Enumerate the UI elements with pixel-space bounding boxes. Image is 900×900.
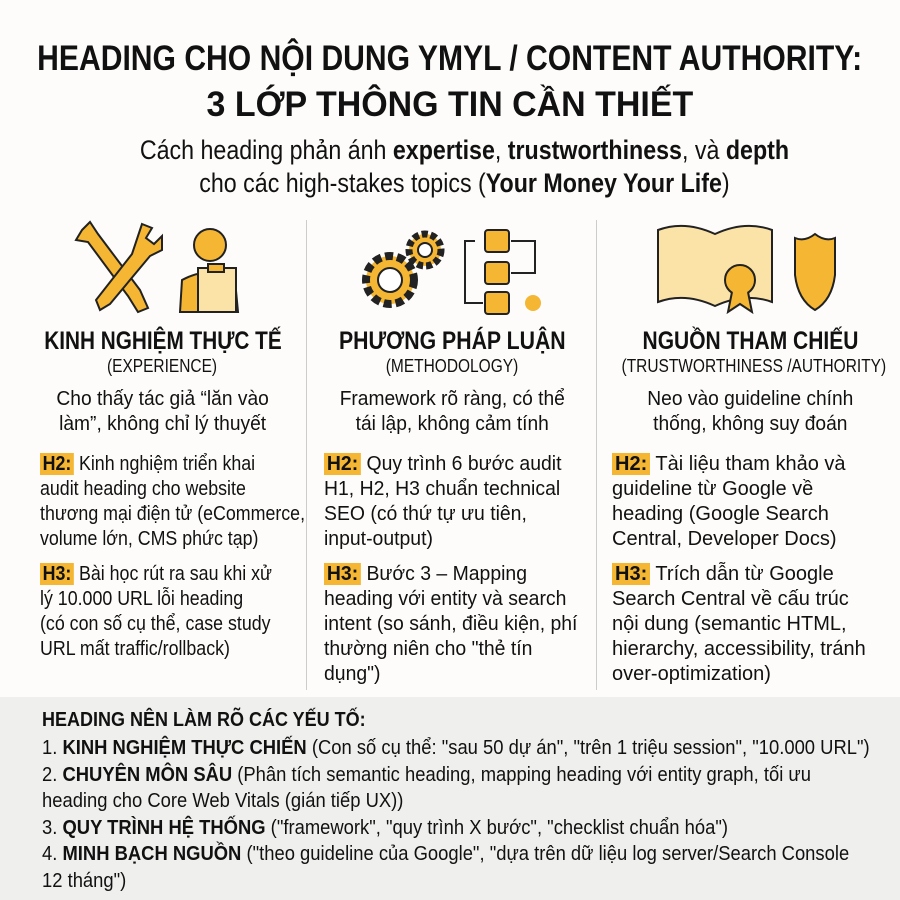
bottom list: 2. CHUYÊN MÔN SÂU (Phân tích semantic heading, mapping heading với entity graph, tối ưu [42, 764, 811, 786]
H2 block [40, 453, 305, 550]
description: Cho thấy tác giả “lăn vào [56, 388, 269, 410]
H3 block: nội dung (semantic HTML, [612, 613, 847, 635]
H2 block: heading (Google Search [612, 503, 829, 525]
H3 block [40, 563, 272, 660]
panel: experience [40, 220, 305, 660]
description [56, 388, 269, 435]
title: HEADING CHO NỘI DUNG YMYL / CONTENT AUTHORITY: [38, 39, 862, 78]
H3 block: heading với entity và search [324, 588, 566, 610]
H2 block: Central, Developer Docs) [612, 528, 837, 550]
H2 block: SEO (có thứ tự ưu tiên, [324, 503, 527, 525]
H2 block: guideline từ Google về [612, 478, 813, 500]
H2 block: H1, H2, H3 chuẩn technical [324, 478, 560, 500]
heading: PHƯƠNG PHÁP LUẬN [339, 327, 566, 355]
H2 block [324, 453, 562, 550]
description: làm”, không chỉ lý thuyết [59, 413, 266, 435]
title [38, 38, 862, 124]
H2 block: volume lớn, CMS phức tạp) [40, 528, 258, 550]
bottom list [42, 736, 870, 892]
H3 block: URL mất traffic/rollback) [40, 638, 230, 660]
description [340, 388, 565, 435]
description: tái lập, không cảm tính [356, 413, 549, 435]
H2 block: input-output) [324, 528, 433, 550]
description: Framework rõ ràng, có thể [340, 388, 565, 410]
H3 block: Search Central về cấu trúc [612, 588, 849, 610]
H3 block: H3: Bước 3 – Mapping [327, 563, 527, 585]
H3 block [324, 563, 578, 685]
H3 block: hierarchy, accessibility, tránh [612, 638, 866, 660]
subtitle [139, 135, 789, 198]
icon: book and shield [657, 224, 836, 314]
bottom list: 4. MINH BẠCH NGUỒN ("theo guideline của Google", "dựa trên dữ liệu log server/Search Console [42, 843, 849, 865]
heading: KINH NGHIỆM THỰC TẾ [44, 327, 282, 355]
H3 block: (có con số cụ thể, case study [40, 613, 271, 635]
bottom list: 12 tháng") [42, 870, 126, 892]
panel: authority [612, 224, 886, 685]
icon: tools and person [74, 220, 240, 314]
icon: gears and flowchart [362, 229, 541, 315]
H3 block: thường niên cho "thẻ tín [324, 638, 532, 660]
H3 block: over-optimization) [612, 663, 771, 685]
H2 block: H2: Quy trình 6 bước audit [327, 453, 561, 475]
bottom list: 1. KINH NGHIỆM THỰC CHIẾN (Con số cụ thể: "sau 50 dự án", "trên 1 triệu session", "10.000 URL") [42, 737, 870, 759]
heading: NGUỒN THAM CHIẾU [642, 327, 858, 355]
H3 block: dụng") [324, 663, 381, 685]
description [647, 388, 853, 435]
H3 block [612, 562, 866, 685]
panel: methodology [324, 229, 578, 685]
bottom list: heading cho Core Web Vitals (gián tiếp UX)) [42, 790, 403, 812]
bottom heading: HEADING NÊN LÀM RÕ CÁC YẾU TỐ: [42, 709, 366, 731]
subheading: (METHODOLOGY) [386, 356, 519, 376]
H2 block: thương mại điện tử (eCommerce, [40, 503, 305, 525]
H2 block: H2: Tài liệu tham khảo và [615, 453, 846, 475]
description: Neo vào guideline chính [647, 388, 853, 410]
title: 3 LỚP THÔNG TIN CẦN THIẾT [207, 85, 693, 124]
description: thống, không suy đoán [653, 413, 847, 435]
bottom list: 3. QUY TRÌNH HỆ THỐNG ("framework", "quy trình X bước", "checklist chuẩn hóa") [42, 816, 728, 838]
H3 block: intent (so sánh, điều kiện, phí [324, 613, 577, 635]
H3 block: H3: Trích dẫn từ Google [615, 563, 834, 585]
H3 block: H3: Bài học rút ra sau khi xử [43, 563, 272, 585]
bottom panel: key elements [0, 697, 900, 900]
subtitle: cho các high-stakes topics (Your Money Your Life) [199, 168, 729, 198]
H2 block [612, 453, 846, 550]
subheading: (TRUSTWORTHINESS /AUTHORITY) [622, 356, 886, 376]
H2 block: audit heading cho website [40, 478, 246, 500]
H2 block: H2: Kinh nghiệm triển khai [43, 453, 255, 475]
H3 block: lý 10.000 URL lỗi heading [40, 588, 243, 610]
subtitle: Cách heading phản ánh expertise, trustworthiness, và depth [139, 135, 789, 165]
subheading: (EXPERIENCE) [107, 356, 218, 376]
